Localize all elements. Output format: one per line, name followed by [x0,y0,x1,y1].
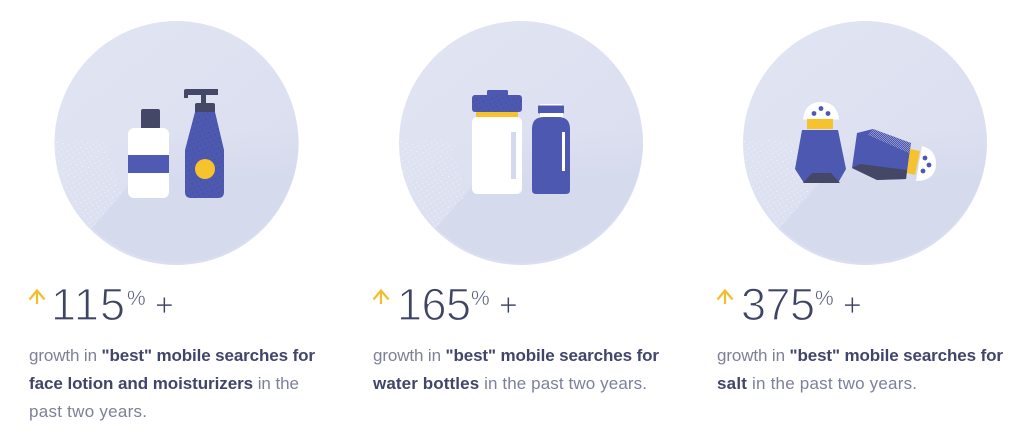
icon: up arrow [30,290,44,304]
icon: tipped salt shaker [852,129,936,181]
icon: blue water bottle [532,104,570,194]
icon: up arrow [374,290,388,304]
stat: 165%: + [499,287,518,323]
stat: 115%: 115 [51,279,125,330]
stat: 375% [718,279,862,330]
icon: pump bottle [184,89,224,198]
circle background: lotion [54,21,299,265]
description: lotion: past two years. [29,402,147,421]
description: salt: salt in the past two years. [717,374,917,393]
stat: 115%: % [127,287,146,310]
icon: white water bottle [472,90,522,194]
icon: white lotion bottle [128,109,169,198]
stat: 115%: + [155,287,174,323]
stat: 165%: 165 [397,279,471,330]
panel: face lotion [29,21,320,421]
panel: water bottles [372,21,664,393]
stat: 375%: + [843,287,862,323]
description: bottles: growth in "best" mobile searches for [373,346,659,365]
circle background: bottles [399,21,643,265]
stat: 165%: % [471,287,490,310]
description: bottles: water bottles in the past two years. [373,374,647,393]
circle background: salt [743,21,987,265]
icon: upright salt shaker [795,102,846,183]
panel: salt [717,21,1008,393]
stat: 375%: 375 [741,279,815,330]
stat: 375%: % [815,287,834,310]
icon: up arrow [718,290,732,304]
stat: 165% [374,279,518,330]
description: lotion: face lotion and moisturizers in the [29,374,299,393]
stat: 115% [30,279,174,330]
description: lotion: growth in "best" mobile searches for [29,346,315,365]
description: salt: growth in "best" mobile searches for [717,346,1003,365]
